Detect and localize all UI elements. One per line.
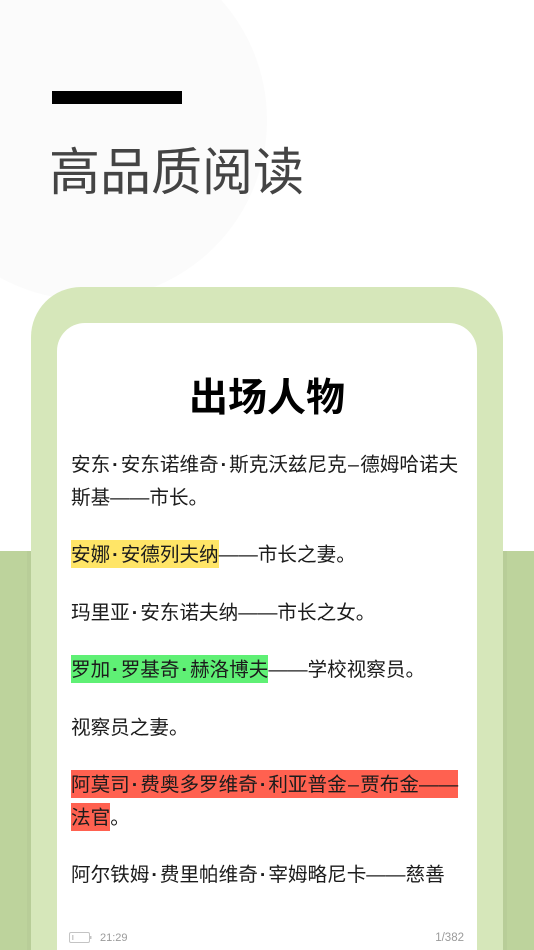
text: school inspector, green highlight (71, 655, 425, 683)
text: mayor line 1: 安东 安东诺维奇 斯克沃兹尼克–德姆哈诺夫 (71, 454, 458, 476)
text: judge line 1, red highlight: · (132, 774, 138, 796)
chapter title: 出场人物 (189, 377, 345, 420)
text: school inspector, green highlight: · (112, 659, 119, 681)
text: mayor line 2: 斯基——市长。 (71, 487, 208, 509)
text: judge line 2, red highlight (71, 803, 130, 831)
text: judge line 1, red highlight: 阿莫司 费奥多罗维奇 利亚普金–贾布金—— (71, 774, 458, 796)
panel: reading page (57, 323, 477, 950)
text: charity line: 阿尔铁姆 费里帕维奇 宰姆略尼卡——慈善 (71, 864, 445, 886)
text: charity line: · (151, 864, 158, 886)
status: clock: 21:29 (100, 932, 128, 944)
text: school inspector, green highlight: 罗加 罗基奇 赫洛博夫 (71, 659, 268, 681)
text: judge line 1, red highlight: · (260, 774, 266, 796)
heading: 高品质阅读 (49, 144, 304, 201)
text: mayor's wife, yellow highlight: 安娜 安德列夫纳 (71, 544, 219, 566)
text: school inspector, green highlight: · (181, 659, 188, 681)
text: inspector's wife: 视察员之妻。 (71, 717, 189, 739)
icon: battery (69, 932, 92, 943)
status: page number: 1/382 (435, 932, 464, 944)
text: judge line 2, red highlight: 。 (110, 807, 130, 829)
text: mayor's daughter: · (132, 602, 138, 624)
panel: phone frame (31, 287, 503, 950)
background green band (0, 551, 534, 950)
text: school inspector, green highlight: ——学校视察员。 (268, 659, 425, 681)
background circle (0, 0, 267, 300)
text: mayor line 1: · (112, 454, 119, 476)
text: mayor's wife, yellow highlight: · (112, 544, 119, 566)
text: charity line: · (260, 864, 266, 886)
text: mayor's wife, yellow highlight: ——市长之妻。 (219, 544, 356, 566)
text: judge line 2, red highlight: 法官 (71, 807, 110, 829)
text: mayor's daughter: 玛里亚 安东诺夫纳——市长之女。 (71, 602, 375, 624)
text: mayor's wife, yellow highlight (71, 540, 356, 568)
text: mayor line 1: · (221, 454, 227, 476)
heading bar (52, 90, 182, 104)
